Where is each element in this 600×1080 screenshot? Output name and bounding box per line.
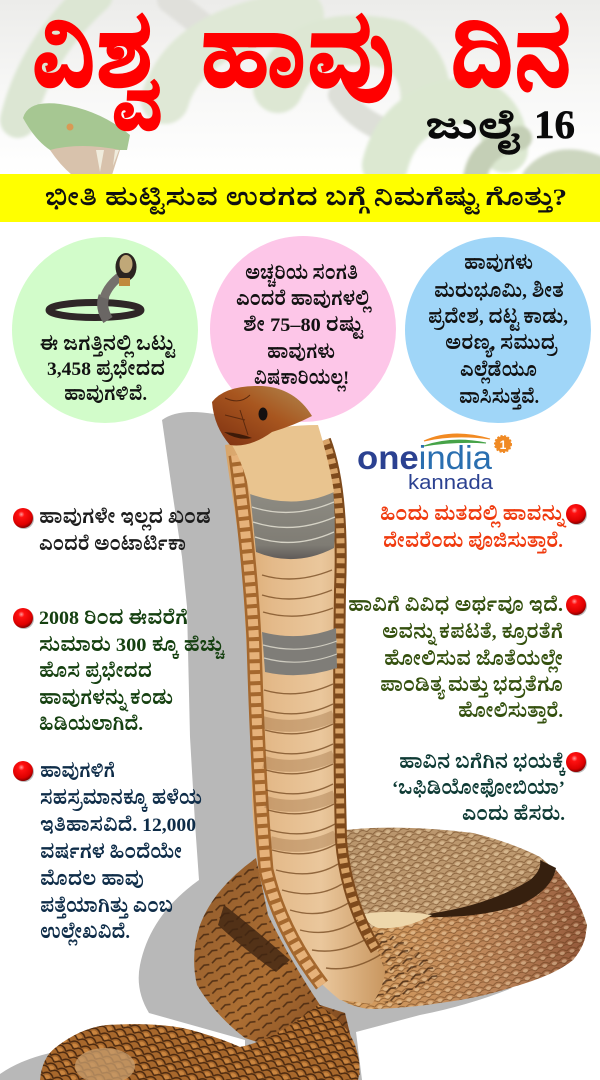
logo badge: [495, 436, 511, 452]
shadow under lower coil: [0, 1053, 60, 1080]
fact: meanings: ಹಾವಿಗೆ ವಿವಿಧ ಅರ್ಥವೂ ಇದೆ.: [348, 594, 563, 616]
panel: blue circle fact: ಮರುಭೂಮಿ, ಶೀತ: [434, 281, 564, 302]
title: ದಿನ: [450, 4, 572, 106]
fact: new species since 2008: [13, 607, 225, 735]
panel: green circle fact: ಹಾವುಗಳಿವೆ.: [64, 383, 147, 405]
icon: small cobra: [49, 253, 141, 320]
fact: Antarctica: [13, 506, 211, 555]
date: [426, 102, 575, 154]
logo: oneindia kannada: oneindia: [357, 439, 493, 476]
fact: ancient history: [13, 761, 202, 945]
grey belly band upper: [250, 488, 335, 559]
fact: meanings: ಪಾಂಡಿತ್ಯ ಮತ್ತು ಭದ್ರತೆಗೂ: [380, 674, 563, 700]
back of big coil: [345, 828, 587, 960]
panel: left facts: [13, 506, 225, 945]
fact: ancient history: ಸಹಸ್ರಮಾನಕ್ಕೂ ಹಳೆಯ: [40, 787, 202, 812]
date: ಜುಲೈ: [426, 109, 520, 154]
darker belly streaks: [262, 716, 336, 846]
fact: ophidiophobia: [392, 751, 587, 825]
fact: Antarctica: ಹಾವುಗಳೇ ಇಲ್ಲದ ಖಂಡ: [39, 506, 211, 530]
panel: pink circle fact: ಹಾವುಗಳು: [267, 342, 335, 363]
fact: ancient history: ವರ್ಷಗಳ ಹಿಂದೆಯೇ: [40, 841, 182, 863]
fact: meanings: [348, 594, 587, 723]
date: 16: [534, 102, 575, 147]
fact: ophidiophobia: ಎಂದು ಹೆಸರು.: [462, 803, 565, 825]
panel: pink circle fact: ಅಚ್ಚರಿಯ ಸಂಗತಿ: [245, 263, 358, 287]
fact: ancient history: ಇತಿಹಾಸವಿದೆ. 12,000: [40, 814, 196, 836]
panel: blue circle fact: ಹಾವುಗಳು: [464, 253, 533, 274]
fact: meanings: ಹೋಲಿಸುತ್ತಾರೆ.: [458, 700, 563, 723]
fact: ophidiophobia: ‘ಒಫಿಡಿಯೋಫೋಬಿಯಾ’: [392, 777, 565, 799]
inner coil shadow: [428, 860, 556, 917]
fact: new species since 2008: ಹಾವುಗಳನ್ನು ಕಂಡು: [39, 688, 173, 712]
fact: ancient history: ಉಲ್ಲೇಖವಿದೆ.: [40, 921, 130, 945]
fact: Antarctica: ಎಂದರೆ ಅಂಟಾರ್ಟಿಕಾ: [39, 533, 186, 555]
panel: pink circle fact: [210, 236, 396, 422]
logo badge: 1: [500, 438, 507, 452]
fact: ancient history: ಪತ್ತೆಯಾಗಿತ್ತು ಎಂಬ: [40, 895, 173, 918]
faded snake head: [23, 103, 130, 175]
fact: worship: ಹಿಂದು ಮತದಲ್ಲಿ ಹಾವನ್ನು: [380, 504, 567, 528]
title: ವಿಶ್ವ: [32, 4, 160, 130]
logo: oneindia kannada: [357, 434, 511, 494]
snake shadow: [139, 412, 512, 1080]
panel: pink circle fact: ಎಂದರೆ ಹಾವುಗಳಲ್ಲಿ: [236, 288, 372, 312]
panel: green circle fact: 3,458 ಪ್ರಭೇದದ: [47, 358, 165, 382]
fact: new species since 2008: ಹೊಸ ಪ್ರಭೇದದ: [39, 660, 152, 684]
fact: ophidiophobia: ಹಾವಿನ ಬಗೆಗಿನ ಭಯಕ್ಕೆ: [399, 751, 566, 776]
panel: blue circle fact: ವಾಸಿಸುತ್ತವೆ.: [459, 386, 539, 409]
light belly in coil: [363, 912, 432, 928]
logo: oneindia kannada: kannada: [408, 472, 494, 494]
left body of coil: [194, 858, 360, 1075]
panel: blue circle fact: ಅರಣ್ಯ, ಸಮುದ್ರ: [445, 333, 558, 358]
fact: new species since 2008: ಹಿಡಿಯಲಾಗಿದೆ.: [39, 713, 143, 735]
fact: meanings: ಅವನ್ನು ಕಪಟತೆ, ಕ್ರೂರತೆಗೆ: [382, 621, 563, 646]
fact: new species since 2008: 2008 ರಿಂದ ಈವರೆಗೆ: [39, 607, 188, 629]
panel: blue circle fact: ಎಲ್ಲೆಡೆಯೂ: [460, 359, 537, 383]
fact: ancient history: ಹಾವುಗಳಿಗೆ: [40, 761, 115, 782]
title: [32, 4, 572, 130]
cobra illustration: [40, 386, 587, 1080]
neck and belly: [225, 430, 385, 1004]
peach belly segments: [262, 570, 380, 969]
panel: pink circle fact: ವಿಷಕಾರಿಯಲ್ಲ!: [254, 368, 349, 391]
panel: green circle fact: ಈ ಜಗತ್ತಿನಲ್ಲಿ ಒಟ್ಟು: [40, 334, 176, 358]
logo swoosh: [424, 434, 490, 446]
panel: green circle fact: [12, 237, 198, 423]
front sweep of coil: [262, 860, 586, 1009]
header background with faded green snake: [0, 0, 600, 178]
yellow subtitle band: ಭೀತಿ ಹುಟ್ಟಿಸುವ ಉರಗದ ಬಗ್ಗೆ ನಿಮಗೆಷ್ಟು ಗೊತ್ತು?: [45, 185, 567, 215]
fact: ancient history: ಮೊದಲ ಹಾವು: [40, 868, 144, 890]
hood and head: [212, 386, 334, 502]
grey belly band lower: [262, 628, 337, 675]
fact: worship: ದೇವರೆಂದು ಪೂಜಿಸುತ್ತಾರೆ.: [383, 530, 563, 553]
fact: new species since 2008: ಸುಮಾರು 300 ಕ್ಕೂ ಹೆಚ್ಚು: [39, 634, 225, 659]
panel: right facts: [348, 504, 587, 825]
dark band on left coil: [218, 905, 290, 972]
fact: worship: [380, 504, 587, 553]
yellow subtitle band: [0, 174, 600, 222]
lower coil: [40, 1005, 359, 1080]
panel: blue circle fact: ಪ್ರದೇಶ, ದಟ್ಟ ಕಾಡು,: [428, 306, 568, 331]
panel: blue circle fact: [405, 237, 591, 423]
side scale stripes: [236, 455, 322, 985]
panel: pink circle fact: ಶೇ 75–80 ರಷ್ಟು: [243, 314, 364, 339]
title: ಹಾವು: [200, 4, 395, 106]
fact: meanings: ಹೋಲಿಸುವ ಜೊತೆಯಲ್ಲೇ: [384, 648, 563, 672]
